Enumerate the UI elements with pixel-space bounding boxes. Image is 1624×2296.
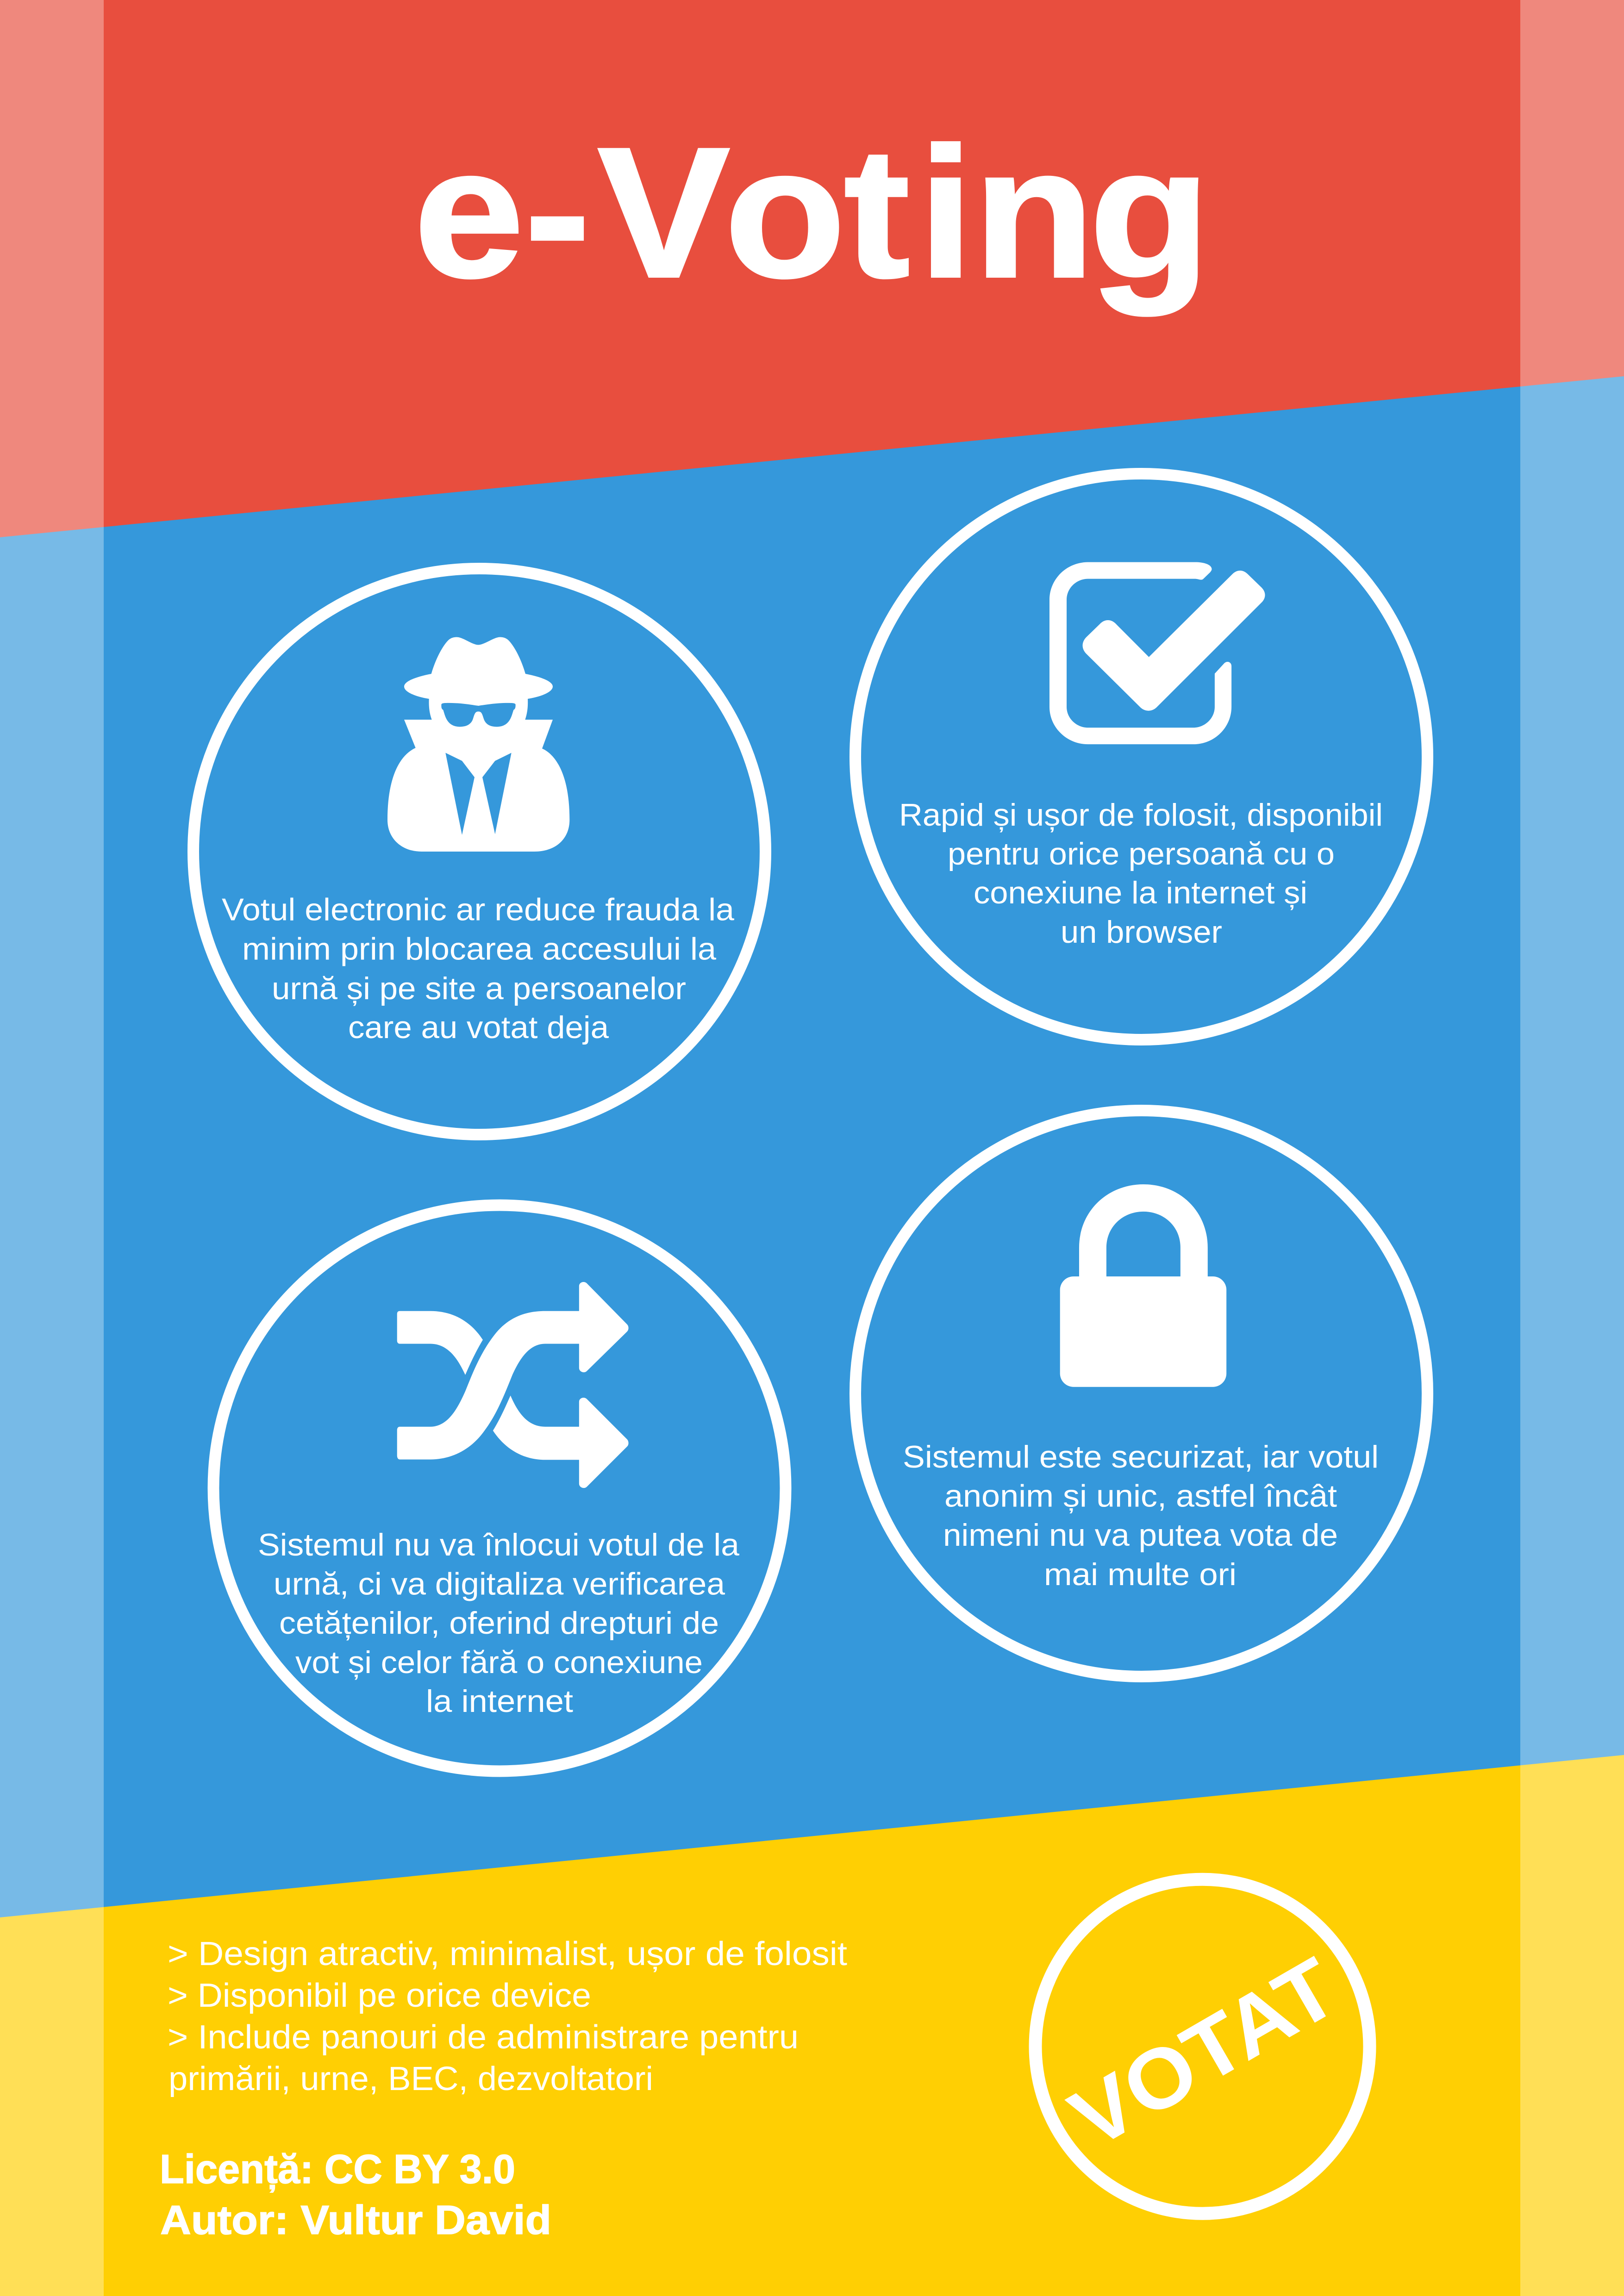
text: fraud reduction: Votul electronic ar reduce frauda la xyxy=(222,892,734,927)
text: digitised verification: la internet xyxy=(426,1684,573,1719)
text: security: mai multe ori xyxy=(1044,1557,1237,1592)
text: feature list: > Include panouri de administrare pentru xyxy=(168,2019,799,2056)
panel: digitised verification circle xyxy=(213,1205,786,1771)
left translucent side strip xyxy=(0,0,104,2296)
circle outline xyxy=(856,474,1428,1039)
text: ease of use: Rapid și ușor de folosit, disponibil xyxy=(899,797,1383,833)
text: digitised verification: cetățenilor, oferind drepturi de xyxy=(279,1605,719,1641)
text: digitised verification: Sistemul nu va înlocui votul de la xyxy=(258,1527,739,1562)
text: feature list xyxy=(168,1935,847,2097)
icon: shuffle arrows xyxy=(397,1282,629,1488)
text: digitised verification: vot și celor fără o conexiune xyxy=(295,1645,703,1680)
text: licence and author: Licență: CC BY 3.0 xyxy=(160,2146,515,2192)
stamp label: VOTAT xyxy=(1055,1939,1353,2166)
text: feature list: primării, urne, BEC, dezvoltatori xyxy=(169,2060,653,2097)
text: ease of use: un browser xyxy=(1061,915,1222,950)
text: fraud reduction: urnă și pe site a persoanelor xyxy=(272,971,686,1006)
text: fraud reduction: care au votat deja xyxy=(348,1010,609,1045)
text: feature list: > Design atractiv, minimalist, ușor de folosit xyxy=(168,1935,847,1972)
panel: fraud reduction circle xyxy=(194,568,766,1135)
text: ease of use xyxy=(899,797,1383,950)
text: feature list: > Disponibil pe orice device xyxy=(168,1977,591,2014)
text: fraud reduction: minim prin blocarea accesului la xyxy=(242,931,716,966)
text: licence and author: Autor: Vultur David xyxy=(160,2197,551,2243)
text: fraud reduction xyxy=(222,892,734,1045)
text: digitised verification xyxy=(258,1527,739,1719)
text: security: anonim și unic, astfel încât xyxy=(944,1478,1337,1513)
icon: spy with hat and sunglasses xyxy=(387,637,569,852)
icon: padlock xyxy=(1060,1184,1226,1387)
panel: red header band xyxy=(0,0,1624,537)
circle outline xyxy=(856,1111,1428,1676)
stamp ring xyxy=(1035,1879,1369,2214)
circle outline xyxy=(194,568,766,1135)
text: ease of use: pentru orice persoană cu o xyxy=(948,836,1335,871)
text: digitised verification: urnă, ci va digitaliza verificarea xyxy=(274,1566,725,1601)
panel: ease of use circle xyxy=(856,474,1428,1039)
panel: yellow footer band xyxy=(0,1755,1624,2296)
text: ease of use: conexiune la internet și xyxy=(974,875,1307,910)
circle outline xyxy=(213,1205,786,1771)
text: security: nimeni nu va putea vota de xyxy=(943,1518,1338,1553)
stamp: VOTAT xyxy=(1035,1879,1369,2214)
panel: security circle xyxy=(856,1111,1428,1676)
text: security xyxy=(903,1439,1379,1592)
text: licence and author xyxy=(160,2146,551,2243)
panel: blue content band xyxy=(0,376,1624,1917)
icon: checked checkbox xyxy=(1049,562,1265,744)
title: e-Voting xyxy=(414,109,1210,317)
text: security: Sistemul este securizat, iar votul xyxy=(903,1439,1379,1475)
right translucent side strip xyxy=(1520,0,1624,2296)
